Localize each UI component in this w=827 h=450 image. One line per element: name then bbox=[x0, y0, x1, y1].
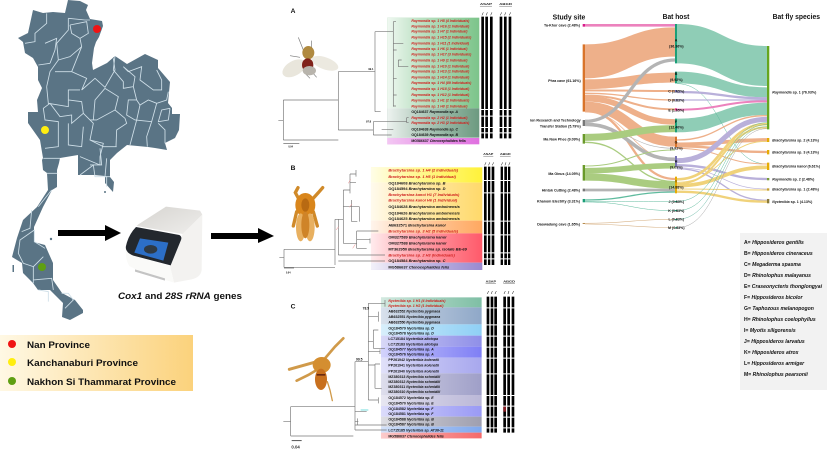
sankey column titles bbox=[553, 14, 820, 21]
panel B: Brachytarsina tree: MT362950 Brachytarsina sp. isolate BE-69 bbox=[388, 246, 468, 251]
panel B: Brachytarsina tree: Brachytarsina sp. 2 H3 (Individuals) bbox=[388, 252, 455, 257]
arrow: thermocycler to trees bbox=[211, 228, 274, 243]
panel B: Brachytarsina tree: B bbox=[291, 165, 296, 172]
illustration: Raymondia fly bbox=[279, 37, 340, 81]
illustration: Brachytarsina fly bbox=[293, 188, 323, 241]
bat host labels: C (1.65%) bbox=[668, 90, 685, 94]
panel B: Brachytarsina tree: OQ184628 Brachytarsina amboinensis bbox=[388, 204, 461, 209]
panel A: Raymondia tree: Raymondia sp. 1 H15 (2 Individuals) bbox=[411, 35, 472, 39]
panel C: Nycteribia tree: Nycteribia sp. 1 H2 (1 Individual) bbox=[388, 304, 444, 308]
panel B: Brachytarsina tree: AB632571 Brachytarsina kanoi bbox=[388, 222, 447, 227]
study site labels: Ma Oinus (14.05%) bbox=[548, 172, 581, 176]
arrow: map to thermocycler bbox=[58, 225, 121, 241]
panel C: Nycteribia tree: C bbox=[291, 303, 296, 310]
sankey nodes bbox=[583, 24, 769, 228]
bat host labels: H bbox=[675, 160, 678, 164]
legend: bat host species: K= Hipposideros atrox bbox=[744, 350, 799, 356]
panel A: Raymondia tree: 97.8 bbox=[366, 119, 372, 123]
bat host labels: (14.88%) bbox=[669, 185, 684, 189]
legend: bat host species: M= Rhinolophus pearsonii bbox=[744, 372, 808, 378]
panel A: Raymondia tree: Raymondia sp. 1 H12 (1 Individual) bbox=[411, 93, 470, 97]
study site labels: Hintok Cutting (2.48%) bbox=[542, 188, 581, 192]
panel B: Brachytarsina tree: MG586637 Ctenocephalides felis bbox=[388, 264, 450, 269]
panel C: Nycteribia tree: LC715185 Nycteribia sp. AT36-11 bbox=[388, 429, 444, 433]
sankey flows: study site to bat host bbox=[585, 25, 675, 228]
panel B: Brachytarsina tree: OQ184584 Brachytarsina sp. C bbox=[388, 258, 446, 263]
panel A: Raymondia tree: MG586637 Ctenocephalides felis bbox=[411, 139, 466, 143]
bat fly species labels: Brachytarsina sp. 1 (2.48%) bbox=[772, 188, 820, 192]
study site labels: Daowadung cave (1.65%) bbox=[537, 222, 581, 226]
panel A: Raymondia tree: 99.1 bbox=[368, 67, 374, 71]
sankey column titles: Bat fly species bbox=[773, 14, 820, 21]
legend: bat host species: J= Hipposideros larvatus bbox=[744, 339, 805, 345]
bat host labels: D (0.83%) bbox=[668, 99, 685, 103]
ASAP and ABGD bars A: ABGD bbox=[499, 2, 513, 6]
panel C: Nycteribia tree bbox=[283, 297, 482, 450]
map of Thailand bbox=[12, 0, 180, 320]
bat host labels: E (1.65%) bbox=[668, 108, 685, 112]
panel C: Nycteribia tree: AB632552 Nycteribia pygmaea bbox=[388, 310, 440, 314]
legend: bat host species: G= Taphozous melanopogon bbox=[744, 306, 814, 312]
panel B: Brachytarsina tree: OQ184625 Brachytarsina amboinensis bbox=[388, 216, 461, 221]
bat fly species labels: Raymondia sp. 2 (2.48%) bbox=[772, 177, 815, 181]
panel C: Nycteribia tree: OQ184587 Nycteribia sp. B bbox=[388, 422, 434, 426]
sankey column titles: Study site bbox=[553, 14, 585, 21]
study site labels: Ta-Khor cave (2.48%) bbox=[544, 24, 581, 28]
study site labels: ion Research and Technology bbox=[530, 119, 581, 123]
panel B: Brachytarsina tree: Brachytarsina sp. 1 H5 (1 Individual) bbox=[388, 174, 457, 179]
panel C: Nycteribia tree: 0.04 bbox=[291, 445, 300, 450]
bat host labels: A bbox=[675, 39, 678, 43]
panel C: Nycteribia tree: 78.5 bbox=[363, 306, 369, 310]
ASAP and ABGD bars A: ASAP bbox=[480, 2, 492, 6]
study site labels: Khanom Electrity (3.31%) bbox=[537, 200, 581, 204]
panel C: Nycteribia tree: PP261942 Nycteribia kolenatii bbox=[388, 358, 440, 362]
ASAP and ABGD bars B: ABGD bbox=[500, 152, 512, 156]
bat host labels: B bbox=[675, 72, 678, 76]
panel A: Raymondia tree: Raymondia sp. 1 H10 (1 Individual) bbox=[411, 64, 470, 68]
panel C: Nycteribia tree: AB632551 Nycteribia pygmaea bbox=[388, 315, 440, 319]
sankey column titles: Bat host bbox=[663, 14, 690, 21]
panel C: Nycteribia tree: MG586637 Ctenocephalides felis bbox=[388, 434, 444, 438]
panel B: Brachytarsina tree: Brachytarsina sp. 1 H4 (2 Individuals) bbox=[388, 168, 459, 173]
panel A: Raymondia tree: Raymondia sp. 1 H16 (1 Individual) bbox=[411, 24, 470, 28]
bat host labels: (9.92%) bbox=[670, 78, 683, 82]
gene caption: Cox1 and 28S rRNA genes bbox=[118, 291, 242, 301]
legend: bat host species: D= Rhinolophus malayanus bbox=[744, 273, 811, 279]
legend: provinces bbox=[0, 335, 193, 391]
bat fly species labels: Brachytarsina sp. 2 (4.13%) bbox=[772, 138, 820, 142]
bat fly species labels: Brachytarsina kanoi (6.61%) bbox=[772, 164, 821, 168]
panel B: Brachytarsina tree: OM327589 Brachytarsina kanoi bbox=[388, 235, 447, 240]
panel A: Raymondia tree: Raymondia sp. 1 H9 (1 Individual) bbox=[411, 59, 468, 63]
panel A: Raymondia tree: OQ184639 Raymondia sp. B bbox=[411, 133, 458, 137]
bat host labels bbox=[668, 39, 685, 230]
panel A: Raymondia tree: Raymondia sp. 2 H2 (1 Individual) bbox=[411, 116, 468, 120]
panel C: Nycteribia tree: AB632550 Nycteribia pygmaea bbox=[388, 320, 440, 324]
bat fly species labels bbox=[772, 91, 821, 204]
bat host labels: K (0.83%) bbox=[668, 209, 685, 213]
panel C: Nycteribia tree: MZ380313 Nycteribia schmidlii bbox=[388, 375, 441, 379]
panel C: Nycteribia tree: 99.5 bbox=[356, 358, 363, 362]
panel C: Nycteribia tree: PP261940 Nycteribia kolenatii bbox=[388, 369, 440, 373]
panel C: Nycteribia tree: Nycteribia sp. 1 H1 (4 Individuals) bbox=[388, 299, 446, 303]
panel A: Raymondia tree: Raymondia sp. 1 H4 (89 Individuals) bbox=[411, 81, 472, 85]
bat host labels: (12.40%) bbox=[669, 126, 684, 130]
study site labels: Transfer Station (5.79%) bbox=[540, 124, 581, 128]
ASAP and ABGD bars B: ASAP bbox=[483, 152, 493, 156]
panel B: Brachytarsina tree: OM327588 Brachytarsina kanoi bbox=[388, 241, 447, 246]
panel C: Nycteribia tree: OQ184576 Nycteribia sp. A bbox=[388, 352, 434, 356]
panel B: Brachytarsina tree bbox=[279, 165, 482, 275]
panel B: Brachytarsina tree: OQ184594 Brachytarsina sp. D bbox=[388, 186, 446, 191]
panel A: Raymondia tree: Raymondia sp. 1 H1 (2 Individuals) bbox=[411, 98, 470, 102]
panel A: Raymondia tree: Raymondia sp. 1 H7 (1 Individual) bbox=[411, 29, 468, 33]
study site labels: Phra cave (61.16%) bbox=[548, 79, 581, 83]
ASAP and ABGD bars C: ASAP bbox=[486, 279, 496, 283]
bat host labels: M (0.83%) bbox=[668, 226, 685, 230]
panel C: Nycteribia tree: OQ184582 Nycteribia sp. F bbox=[388, 407, 434, 411]
panel A: Raymondia tree: Raymondia sp. 1 H11 (1 Individual) bbox=[411, 42, 470, 46]
study site labels bbox=[530, 24, 581, 226]
panel C: Nycteribia tree: MZ380311 Nycteribia schmidlii bbox=[388, 385, 441, 389]
panel A: Raymondia tree: Raymondia sp. 2 H3 (2 Individuals) bbox=[411, 121, 470, 125]
bat fly species labels: Nycteribia sp. 1 (4.13%) bbox=[772, 200, 813, 204]
panel A: Raymondia tree: Raymondia sp. 1 H5 (4 Individuals) bbox=[411, 19, 470, 23]
bat host labels: J (0.83%) bbox=[669, 200, 685, 204]
legend: bat host species bbox=[740, 233, 827, 390]
legend: bat host species: I= Myotis siligorensis bbox=[744, 328, 796, 334]
panel A: Raymondia tree bbox=[278, 8, 479, 148]
legend: bat host species: E= Craseonycteris thonglongyai bbox=[744, 284, 823, 290]
legend: bat host species: F= Hipposideros bicolor bbox=[744, 295, 803, 301]
ASAP and ABGD bars A bbox=[480, 2, 513, 138]
panel A: Raymondia tree: 0.04 bbox=[288, 145, 294, 148]
legend: provinces: Kanchanaburi Province bbox=[27, 358, 138, 369]
bat host labels: G bbox=[675, 141, 678, 145]
panel A: Raymondia tree: Raymondia sp. 1 H8 (1 Individual) bbox=[411, 104, 468, 108]
panel C: Nycteribia tree: MZ380312 Nycteribia schmidlii bbox=[388, 380, 441, 384]
panel B: Brachytarsina tree: Brachytarsina sp. 3 H2 (5 Individuals) bbox=[388, 228, 459, 233]
panel B: Brachytarsina tree: OQ184626 Brachytarsina amboinensis bbox=[388, 210, 461, 215]
panel B: Brachytarsina tree: Brachytarsina kanoi H6 (1 Individual) bbox=[388, 198, 458, 203]
panel C: Nycteribia tree: OQ184579 Nycteribia sp. D bbox=[388, 327, 434, 331]
panel C: Nycteribia tree: OQ184577 Nycteribia sp. A bbox=[388, 347, 434, 351]
legend: bat host species: L= Hipposideros armiger bbox=[744, 361, 805, 367]
panel A: Raymondia tree: Raymondia sp. 1 H18 (1 Individual) bbox=[411, 87, 470, 91]
bat fly species labels: Raymondia sp. 1 (76.03%) bbox=[772, 91, 817, 95]
bat host labels: (9.92%) bbox=[670, 147, 683, 151]
bat host labels: I bbox=[675, 179, 676, 183]
panel C: Nycteribia tree: OQ184570 Nycteribia sp. E bbox=[388, 401, 434, 405]
legend: provinces: Nan Province bbox=[27, 340, 90, 351]
ASAP and ABGD bars B bbox=[483, 152, 513, 265]
bat host labels: (9.09%) bbox=[670, 165, 683, 169]
panel A: Raymondia tree: A bbox=[291, 8, 296, 15]
panel A: Raymondia tree: Raymondia sp. 1 H6 (1 Individual) bbox=[411, 47, 468, 51]
panel C: Nycteribia tree: MZ380310 Nycteribia schmidlii bbox=[388, 390, 441, 394]
panel A: Raymondia tree: Raymondia sp. 1 H14 (1 Individual) bbox=[411, 76, 470, 80]
sankey diagram: study site, bat host, bat fly species bbox=[530, 14, 821, 230]
bat host labels: F bbox=[675, 120, 678, 124]
bat host labels: (36.36%) bbox=[669, 44, 684, 48]
legend: bat host species: H= Rhinolophus coelophyllus bbox=[744, 317, 816, 323]
panel C: Nycteribia tree: LC715183 Nycteribia allotopa bbox=[388, 342, 438, 346]
panel A: Raymondia tree: Raymondia sp. 1 H17 (3 Individuals) bbox=[411, 53, 472, 57]
ASAP and ABGD bars C bbox=[485, 279, 516, 433]
sankey flows: bat host to bat fly species bbox=[677, 24, 767, 228]
legend: bat host species: A= Hipposideros gentilis bbox=[744, 240, 804, 246]
panel A: Raymondia tree: Raymondia sp. 1 H13 (1 Individual) bbox=[411, 70, 470, 74]
panel B: Brachytarsina tree: 0.04 bbox=[286, 272, 291, 275]
icon: PCR thermocycler bbox=[126, 207, 202, 283]
panel C: Nycteribia tree: LC715184 Nycteribia allotopa bbox=[388, 337, 438, 341]
panel A: Raymondia tree: OQ184637 Raymondia sp. A bbox=[411, 110, 458, 114]
legend: bat host species: C= Megaderma spasma bbox=[744, 262, 801, 268]
panel A: Raymondia tree: OQ184638 Raymondia sp. C bbox=[411, 127, 458, 131]
panel C: Nycteribia tree: OQ184578 Nycteribia sp. D bbox=[388, 332, 434, 336]
study site labels: Ma Now Phee (9.09%) bbox=[543, 137, 581, 141]
bat fly species labels: Brachytarsina sp. 3 (4.13%) bbox=[772, 150, 820, 154]
illustration: Nycteribia fly bbox=[289, 338, 343, 401]
legend: provinces: Nakhon Si Thammarat Province bbox=[27, 377, 176, 388]
panel C: Nycteribia tree: OQ184572 Nycteribia sp. E bbox=[388, 396, 434, 400]
panel C: Nycteribia tree: PP261941 Nycteribia kolenatii bbox=[388, 364, 440, 368]
ASAP and ABGD bars C: ABGD bbox=[503, 279, 516, 283]
panel B: Brachytarsina tree: OQ184608 Brachytarsina sp. B bbox=[388, 180, 446, 185]
legend: bat host species: B= Hipposideros cineraceus bbox=[744, 251, 813, 257]
panel C: Nycteribia tree: OQ184588 Nycteribia sp. B bbox=[388, 417, 434, 421]
bat host labels: L (0.83%) bbox=[668, 218, 685, 222]
panel B: Brachytarsina tree: Brachytarsina kanoi H1 (7 Individuals) bbox=[388, 192, 460, 197]
panel C: Nycteribia tree: OQ184581 Nycteribia sp. F bbox=[388, 412, 434, 416]
